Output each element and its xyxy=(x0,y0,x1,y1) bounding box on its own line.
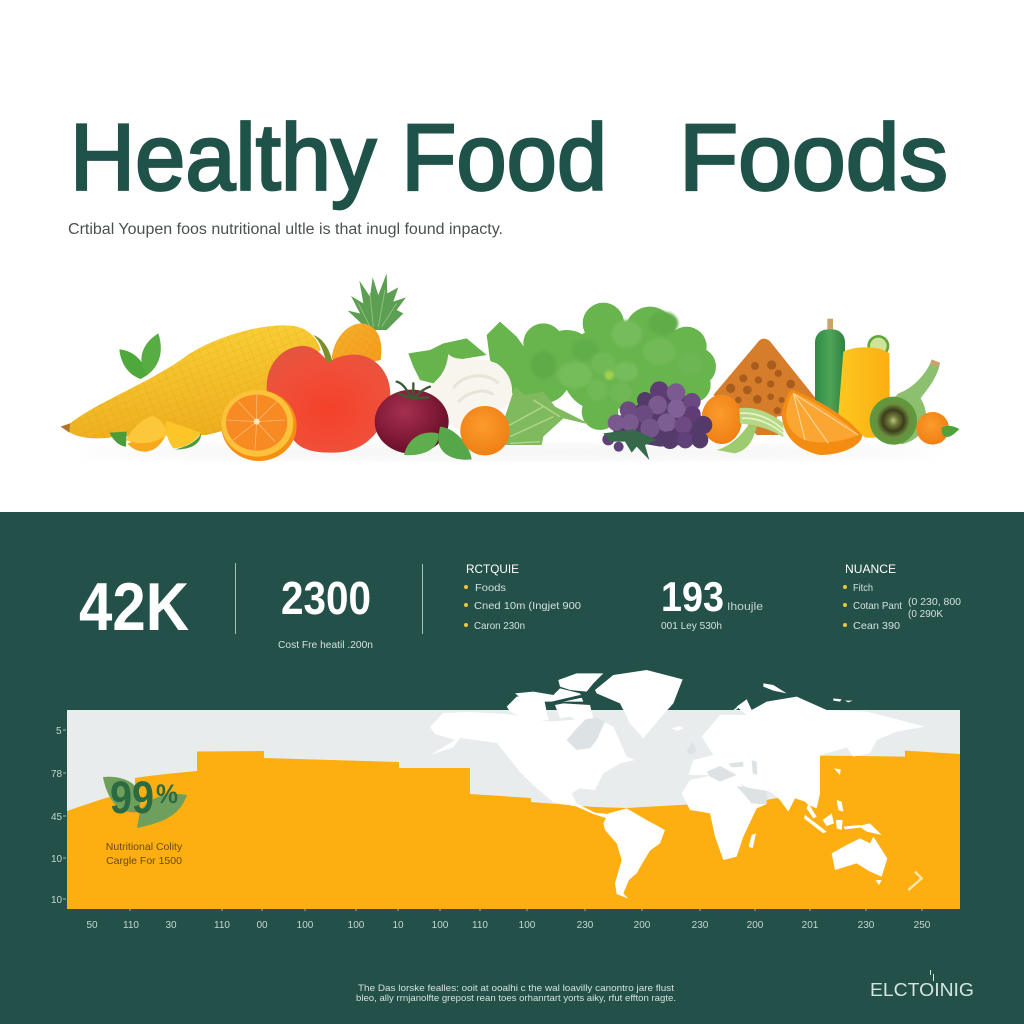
list: RCTQUIE: RCTQUIE xyxy=(466,562,519,576)
food shadow xyxy=(80,447,940,457)
list: RCTQUIE: Cned 10m (Ingjet 900 xyxy=(474,600,581,612)
x axis labels: 110 xyxy=(472,920,488,931)
list: NUANCE: (0 290K xyxy=(908,608,943,620)
y axis labels: 78 xyxy=(51,769,63,780)
map: Iceland xyxy=(672,726,683,731)
list: NUANCE: NUANCE xyxy=(845,562,896,576)
icon: small orange xyxy=(460,406,510,455)
map: New Zealand xyxy=(908,872,922,890)
stat: 2300 xyxy=(278,572,373,651)
x axis labels xyxy=(86,920,931,931)
figure: 99%: % xyxy=(156,779,178,809)
icon: right group grapes, snacks and fruit xyxy=(602,319,959,460)
icon: halved orange xyxy=(221,390,297,461)
x axis labels: 110 xyxy=(214,920,230,931)
map: Australia xyxy=(832,837,887,877)
x axis labels: 100 xyxy=(519,920,536,931)
stat: 42K: 42K xyxy=(79,569,189,645)
list: RCTQUIE: Caron 230n xyxy=(474,620,525,632)
panel: dark green data section xyxy=(0,512,1024,1024)
list: NUANCE: Cotan Pant xyxy=(853,600,902,612)
footer note xyxy=(356,983,676,1004)
map: Indonesia and Pacific islands xyxy=(804,768,882,835)
list: RCTQUIE xyxy=(464,562,581,632)
icon: corn cob xyxy=(61,325,321,438)
y axis labels: 10 xyxy=(51,895,63,906)
stat: 193 xyxy=(661,573,763,632)
map: Eurasia xyxy=(688,697,925,812)
x axis labels: 100 xyxy=(432,920,449,931)
x axis labels: 30 xyxy=(165,920,177,931)
map: North America xyxy=(430,712,635,818)
illustration: row of healthy foods xyxy=(61,273,959,461)
y axis labels: 45 xyxy=(51,812,63,823)
icon: lettuce leaves xyxy=(408,303,716,430)
icon: grape cluster xyxy=(602,381,712,460)
icon: juice glass xyxy=(838,335,890,438)
map: inland seas xyxy=(687,742,767,804)
divider xyxy=(422,564,423,634)
x axis labels: 200 xyxy=(747,920,764,931)
chart orange area xyxy=(67,751,960,909)
x axis labels: 200 xyxy=(634,920,651,931)
icon: kiwi gourd xyxy=(870,359,940,445)
map: Hudson Bay xyxy=(567,715,605,750)
y axis labels: 10 xyxy=(51,854,63,865)
icon: leaf behind figure xyxy=(103,777,187,828)
x axis labels: 230 xyxy=(692,920,709,931)
list: RCTQUIE: Foods xyxy=(475,582,506,594)
footer note: bleo, ally rrnjanolfte grepost rean toes orhanrtart yorts aiky, rfut effton ragte. xyxy=(356,993,676,1004)
map: Madagascar xyxy=(749,833,756,848)
map: Tasmania xyxy=(876,880,882,885)
title: Foods xyxy=(679,106,948,210)
title xyxy=(70,106,948,210)
x axis labels: 230 xyxy=(577,920,594,931)
x axis labels: 100 xyxy=(297,920,314,931)
stat: 193: 001 Ley 530h xyxy=(661,620,722,632)
caption: Cargle For 1500 xyxy=(106,855,182,867)
stat: 193: 193 xyxy=(661,573,724,620)
logo: ELCTOINIG xyxy=(870,980,974,1000)
subtitle text: Crtibal Youpen foos nutritional ultle is that inugl found inpacty. xyxy=(68,221,503,238)
list: NUANCE: Cean 390 xyxy=(853,620,900,632)
icon: leaves by corn xyxy=(119,333,161,379)
x axis labels: 201 xyxy=(802,920,819,931)
stat: 193: Ihoujle xyxy=(727,601,763,613)
map: Arctic islands xyxy=(507,673,603,720)
icon: herb bundle xyxy=(493,387,592,445)
x axis labels: 110 xyxy=(123,920,139,931)
axis tick marks xyxy=(63,730,922,911)
x axis labels: 250 xyxy=(914,920,931,931)
x axis labels: 100 xyxy=(348,920,365,931)
logo xyxy=(870,970,974,1000)
icon: cucumber xyxy=(815,319,845,417)
icon: tiny orange with leaf xyxy=(916,412,959,445)
x axis labels: 10 xyxy=(392,920,404,931)
map: world continents xyxy=(430,670,925,899)
icon: red tomato apple xyxy=(267,335,390,453)
chart: area chart with world map xyxy=(51,670,960,931)
icon: lemon pieces xyxy=(109,416,201,452)
y axis labels: 5 xyxy=(56,726,62,737)
list: NUANCE xyxy=(843,562,961,632)
map: Greenland xyxy=(595,670,683,738)
panel: white header background xyxy=(0,0,1024,512)
figure: 99%: 99 xyxy=(110,772,154,823)
x axis labels: 50 xyxy=(86,920,98,931)
caption: Nutritional Colity xyxy=(106,841,183,853)
title: Healthy Food xyxy=(70,106,607,210)
icon: orange wedge xyxy=(782,389,862,455)
icon: cream swirl xyxy=(430,354,512,430)
map: Africa xyxy=(682,775,767,860)
x axis labels: 00 xyxy=(256,920,268,931)
map: South America xyxy=(603,808,665,899)
stat: 2300: 2300 xyxy=(281,572,371,624)
footer note: The Das lorske fealles: ooit at ooalhi c the wal loavilly canontro jare flust xyxy=(358,983,674,994)
x axis labels: 230 xyxy=(858,920,875,931)
chart plot background xyxy=(67,710,960,909)
icon: waffle triangle xyxy=(713,339,825,435)
icon: mint leaves xyxy=(404,427,472,460)
divider xyxy=(235,563,236,634)
icon: plum with stem xyxy=(375,382,449,454)
icon: celery stalks xyxy=(717,408,783,453)
icon: left group corn, fruit and leaves xyxy=(61,273,512,461)
map: Russian Arctic islands xyxy=(733,683,853,710)
icon: orange behind celery xyxy=(701,395,742,444)
icon: pineapple xyxy=(332,273,406,367)
y axis labels xyxy=(51,726,63,906)
list: NUANCE: Fitch xyxy=(853,582,873,594)
list: NUANCE: (0 230, 800 xyxy=(908,596,961,608)
stat: 2300: Cost Fre heatil .200n xyxy=(278,639,373,651)
callout: 99% nutritional quality xyxy=(103,772,187,867)
caption xyxy=(106,841,183,867)
